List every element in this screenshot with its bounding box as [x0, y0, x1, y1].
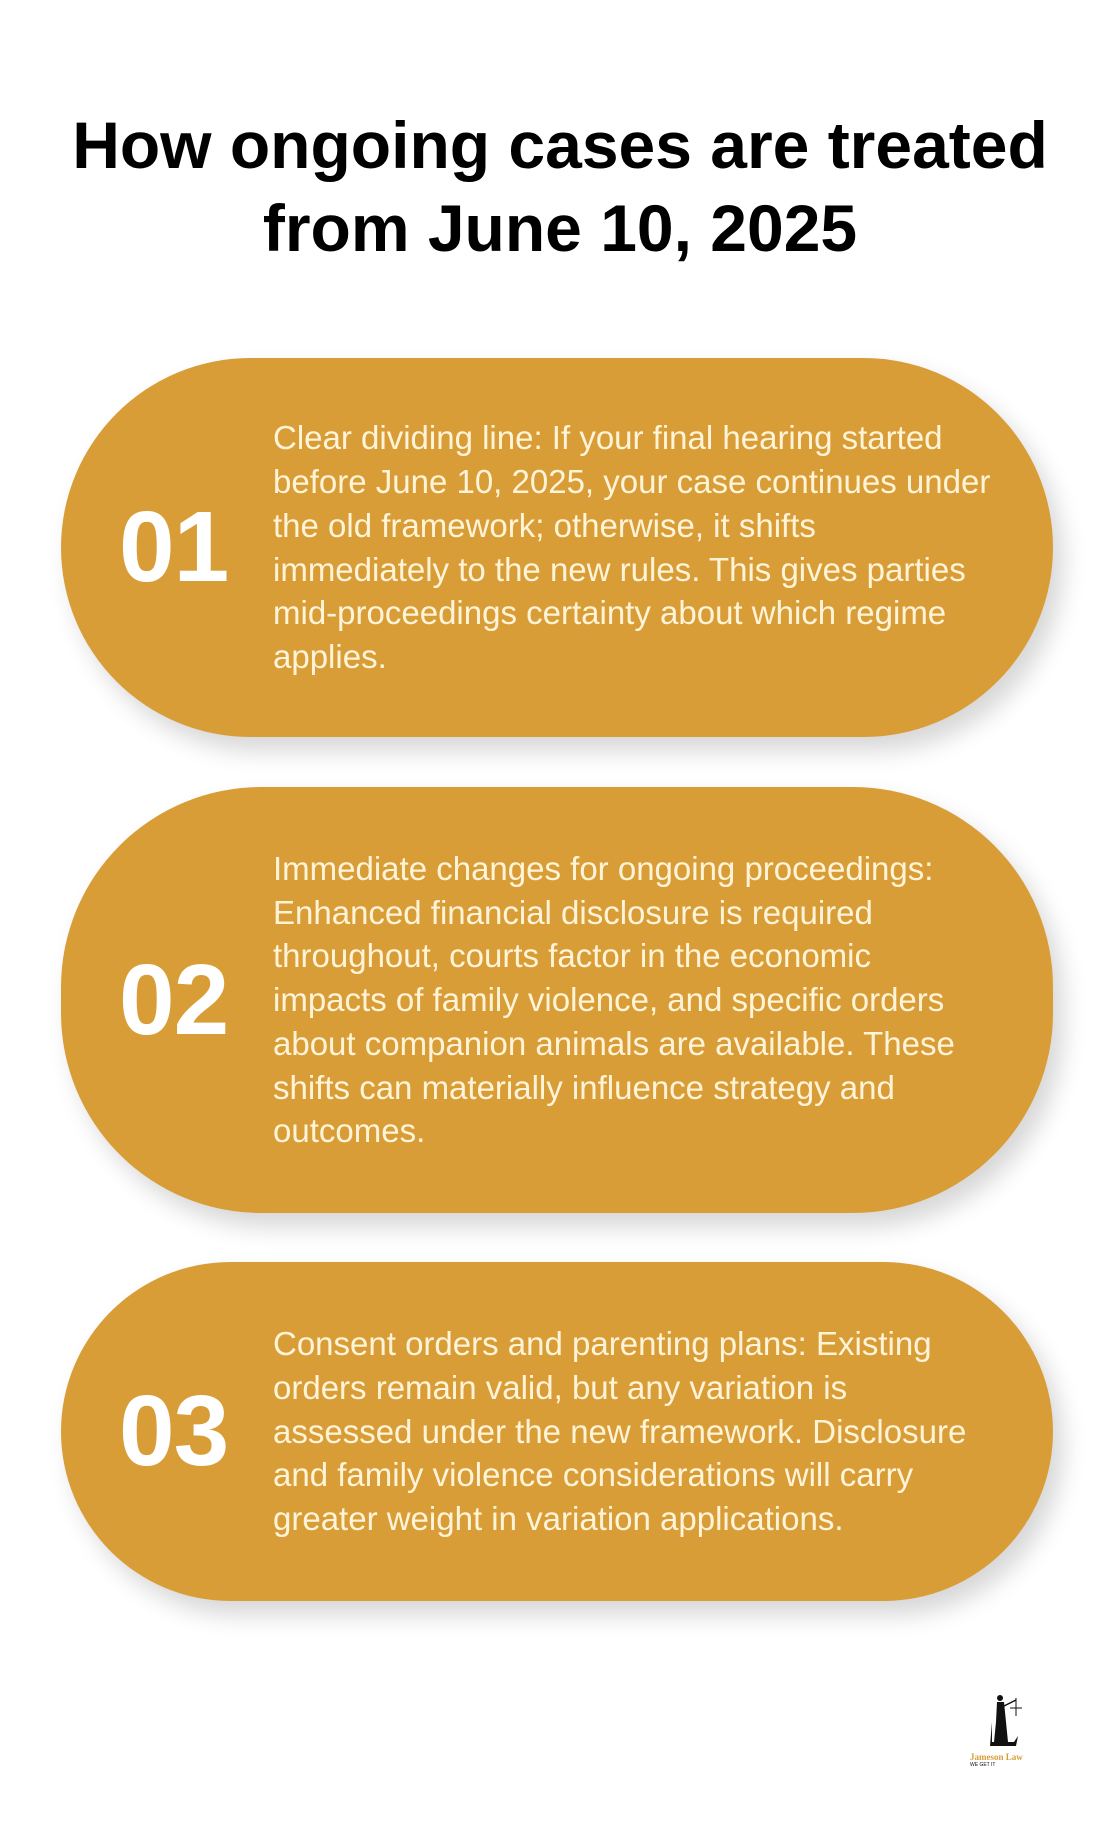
text 02 [273, 850, 955, 1149]
text 02: shifts can materially influence strategy and [273, 1069, 895, 1106]
text 02: about companion animals are available. These [273, 1025, 955, 1062]
text 01: applies. [273, 638, 387, 675]
text 02: Immediate changes for ongoing proceedings: [273, 850, 933, 887]
panel: 03 [61, 1262, 1053, 1601]
text 01: immediately to the new rules. This gives parties [273, 550, 966, 588]
icon: lady justice [990, 1695, 1022, 1746]
number 03: 03 [119, 1375, 228, 1487]
text 01: Clear dividing line: If your final hearing started [273, 419, 943, 456]
panel: 01 [61, 358, 1053, 737]
title [72, 108, 1048, 265]
text 02: throughout, courts factor in the economic [273, 937, 871, 974]
text 02: outcomes. [273, 1112, 425, 1149]
text 03 [273, 1325, 966, 1537]
logo text [970, 1752, 1023, 1768]
logo [970, 1695, 1023, 1768]
number 02: 02 [119, 944, 228, 1056]
text 03: greater weight in variation applications. [273, 1500, 844, 1537]
title: from June 10, 2025 [263, 191, 857, 265]
text 02: impacts of family violence, and specific orders [273, 981, 944, 1018]
text 01: the old framework; otherwise, it shifts [273, 507, 816, 544]
logo text: WE GET IT [970, 1762, 995, 1768]
text 03: Consent orders and parenting plans: Existing [273, 1325, 932, 1362]
text 01: mid-proceedings certainty about which regime [273, 594, 946, 631]
text 03: orders remain valid, but any variation is [273, 1369, 847, 1406]
text 03: and family violence considerations will carry [273, 1456, 913, 1493]
text 01: before June 10, 2025, your case continues under [273, 463, 990, 500]
panel: 02 [61, 787, 1053, 1213]
logo text: Jameson Law [970, 1752, 1023, 1762]
title: How ongoing cases are treated [72, 108, 1048, 182]
text 01 [273, 419, 990, 675]
number 01: 01 [119, 491, 228, 603]
text 02: Enhanced financial disclosure is required [273, 894, 873, 931]
text 03: assessed under the new framework. Disclosure [273, 1413, 966, 1450]
